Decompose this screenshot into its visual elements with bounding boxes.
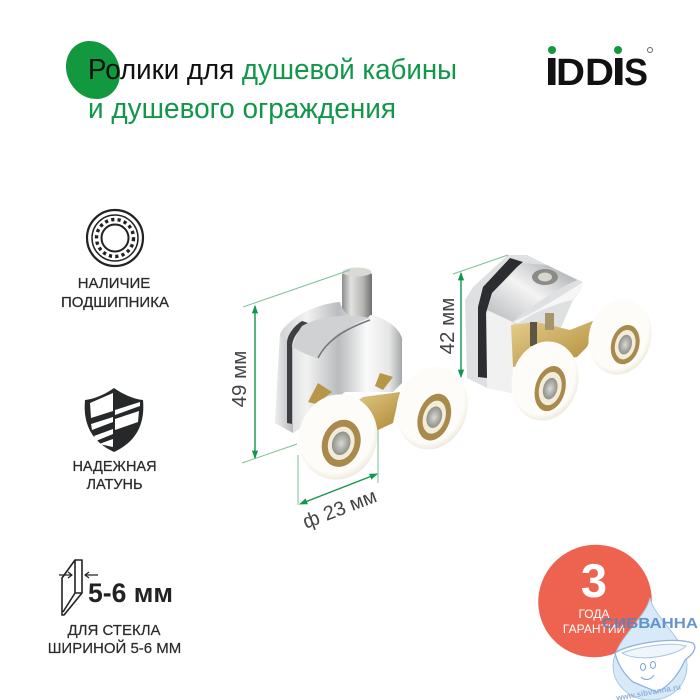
rear wheel: [580, 292, 660, 382]
icon: shield: [85, 388, 143, 452]
left roller product: [275, 268, 478, 490]
logo: IDDIS: [548, 46, 652, 94]
bathtub: [615, 640, 695, 692]
front wheel: [288, 384, 388, 490]
warranty badge: 3: [581, 554, 607, 607]
title: [55, 31, 457, 125]
dimension: 23 mm: [298, 430, 380, 534]
chrome body: [275, 302, 402, 433]
label: glass: ДЛЯ СТЕКЛА: [67, 622, 161, 639]
chrome body: [465, 255, 583, 393]
logo: IDDIS: S: [624, 52, 648, 94]
label: glass: ШИРИНОЙ 5-6 ММ: [48, 639, 181, 657]
warranty badge: ГАРАНТИИ: [563, 622, 625, 636]
label: brass: НАДЕЖНАЯ: [72, 459, 157, 475]
dimension: 42 mm: 42 мм: [436, 298, 459, 354]
title text: и душевого ограждения: [88, 93, 396, 125]
title text: Ролики для душевой кабины: [88, 54, 457, 86]
logo: IDDIS: DD: [556, 52, 614, 94]
brass axle: [345, 392, 400, 430]
dimension: 49 mm: [228, 270, 350, 463]
glass size value: 5-6 мм: [88, 578, 173, 608]
warranty badge: [518, 524, 672, 678]
label: bearing: ПОДШИПНИКА: [61, 294, 169, 311]
label: bearing: НАЛИЧИЕ: [78, 275, 150, 292]
brand name: СИБВАННА: [602, 615, 698, 632]
front wheel: [503, 334, 587, 428]
label: brass: ЛАТУНЬ: [86, 477, 143, 493]
title text: [88, 54, 457, 125]
warranty badge: ГОДА: [578, 607, 610, 621]
dimension: 23 mm: ф 23 мм: [300, 485, 380, 534]
chrome cap: [487, 263, 577, 322]
rear wheel: [386, 357, 478, 459]
right roller product: [465, 255, 660, 428]
brass bracket: [511, 318, 600, 367]
dimension: 49 mm: 49 мм: [228, 351, 251, 407]
dimension: 42 mm: [436, 255, 508, 377]
icon: bearing: [87, 210, 143, 266]
bathtub face: [640, 662, 656, 679]
watermark: Sibvanna: [602, 598, 698, 700]
icon: glass thickness: [59, 560, 98, 615]
pin: [342, 270, 372, 322]
drop: [613, 598, 687, 700]
green blob: [55, 31, 131, 109]
